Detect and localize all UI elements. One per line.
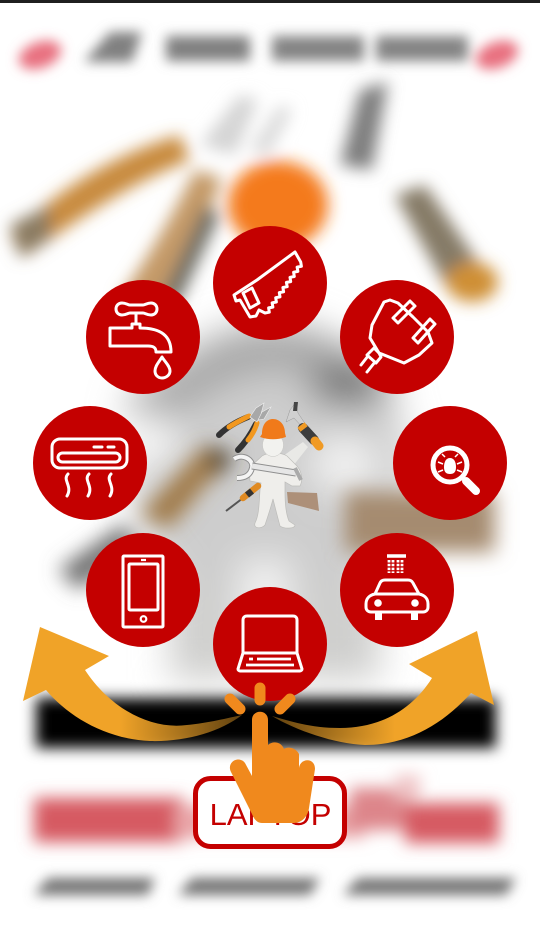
- blurred background: red headline: [34, 775, 499, 843]
- curved arrow: left: [23, 627, 242, 741]
- figure body: [249, 434, 308, 528]
- pliers: [219, 403, 271, 450]
- top bar: [0, 0, 540, 3]
- blurred background: title strip: [15, 32, 522, 75]
- curved arrow: right: [272, 631, 494, 745]
- icon circle: bug search magnifier: [393, 406, 507, 520]
- icon circle: laptop: [213, 587, 327, 701]
- orange hard hat: [260, 419, 286, 439]
- blurred background: black bar: [36, 698, 496, 748]
- icon circle: saw: [213, 226, 327, 340]
- label box: laptop: LAPTOP: [210, 797, 331, 832]
- wooden ruler: [287, 492, 319, 511]
- screwdriver: [226, 486, 258, 511]
- blurred background: body and lower tools: [122, 320, 410, 680]
- blurred background: grey sub-line: [34, 878, 516, 895]
- centre figure: handyman with tools: [219, 402, 319, 528]
- tapping hand icon: [230, 688, 315, 823]
- blurred background: enlarged tools photo: [10, 82, 498, 305]
- icon circle: smartphone: [86, 533, 200, 647]
- label box: laptop: [196, 778, 344, 846]
- icon circle: electric plug: [340, 280, 454, 394]
- icon circle: car wash: [340, 533, 454, 647]
- icon circle: air conditioner: [33, 406, 147, 520]
- icon circle: water tap: [86, 280, 200, 394]
- wrench: [234, 457, 301, 480]
- hammer: [286, 402, 319, 446]
